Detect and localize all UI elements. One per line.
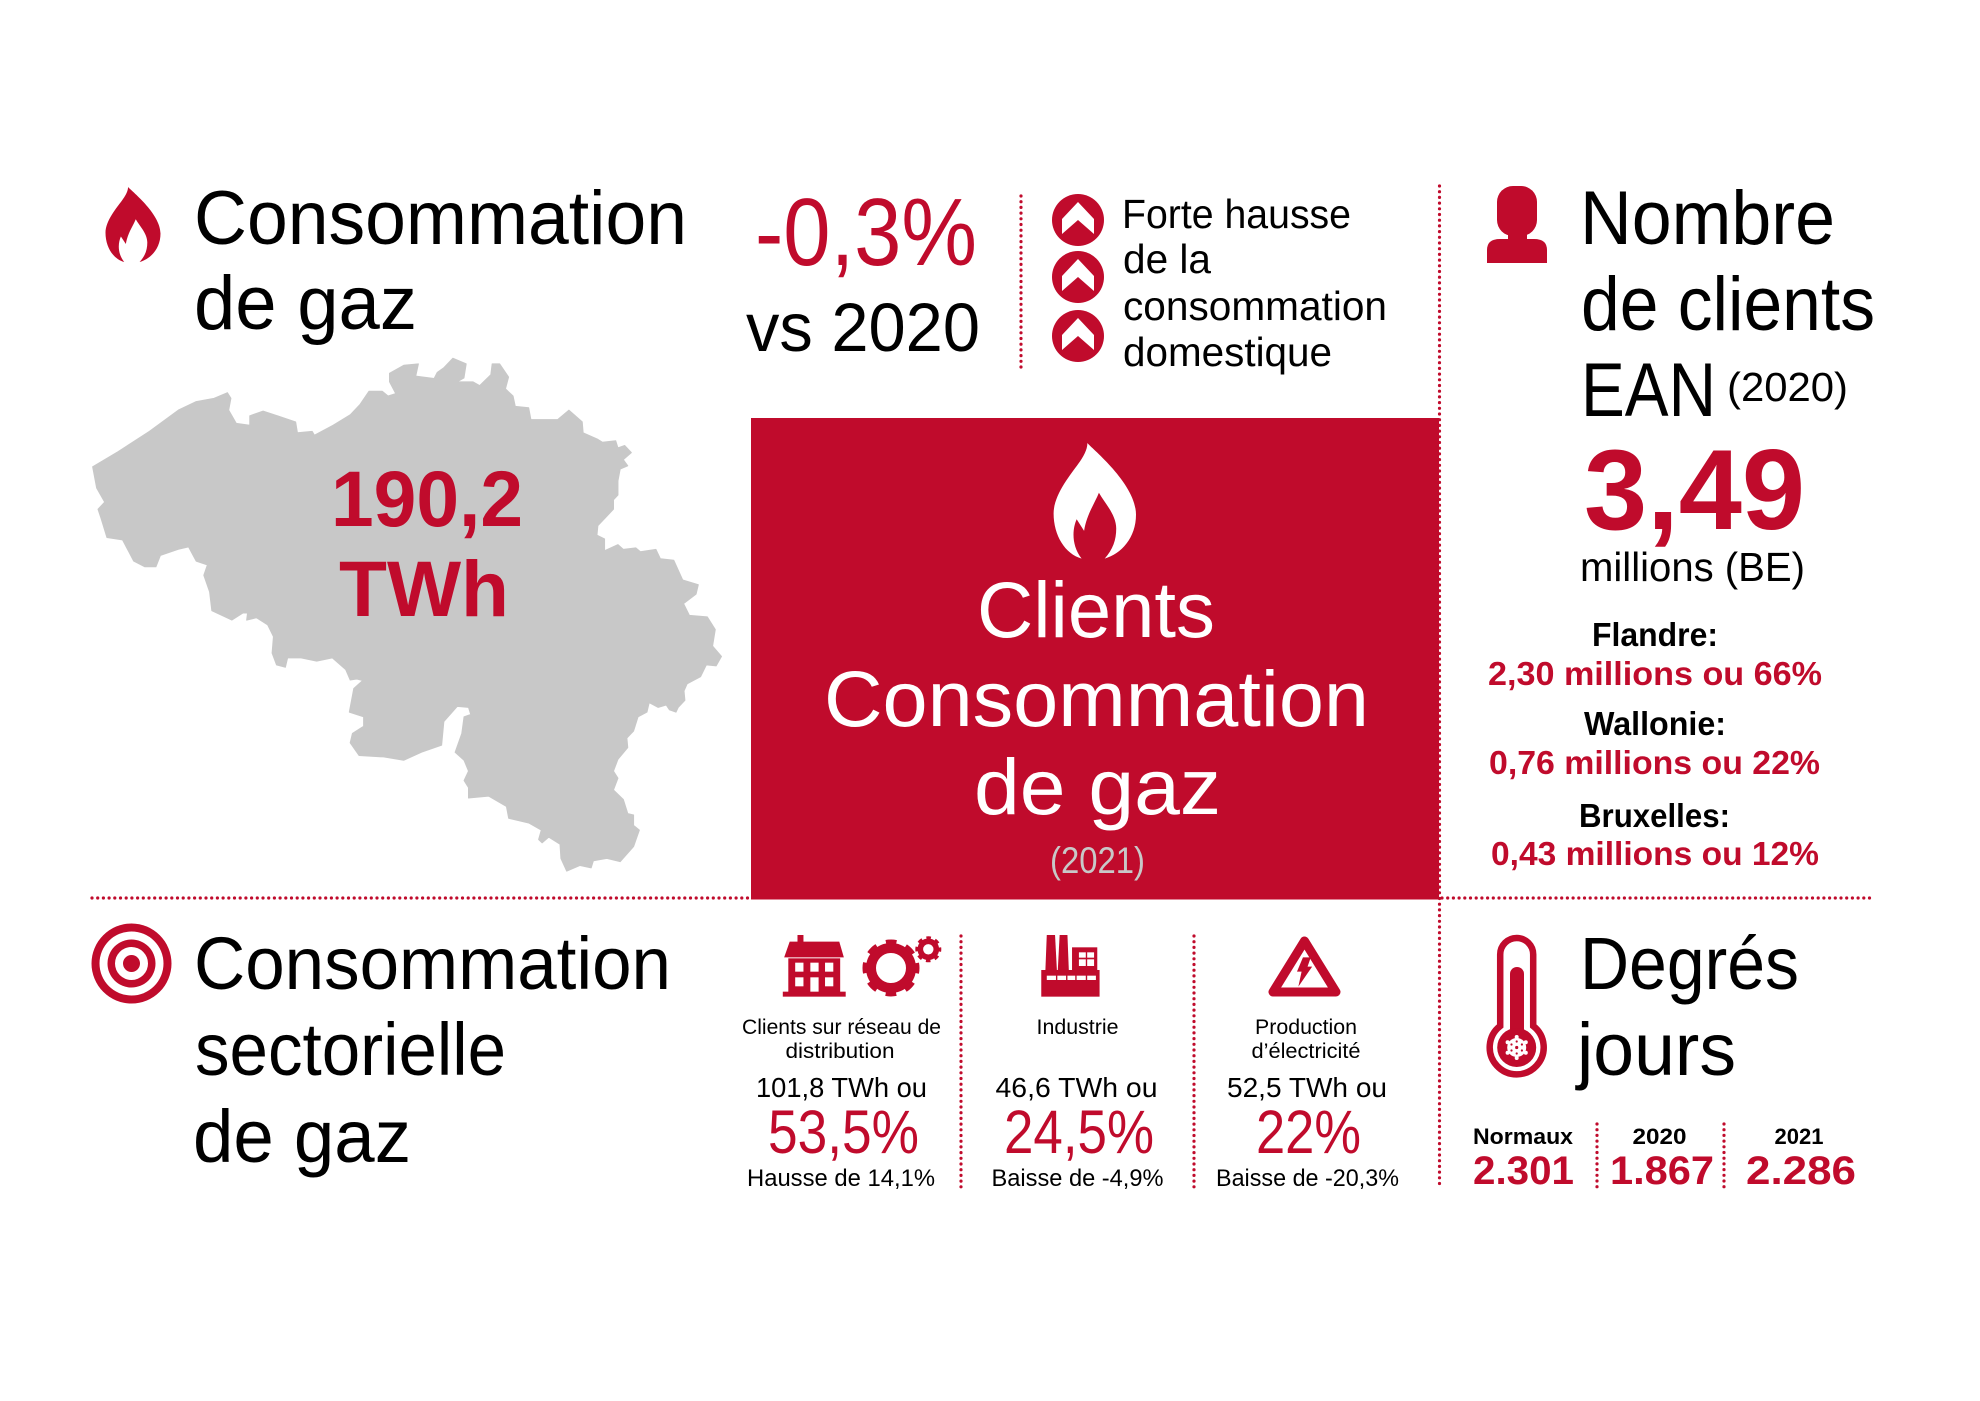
icon: thermometer [1490,938,1544,1074]
change versus 2020: -0,3% [755,179,977,286]
heading: nombre de clients EAN: Nombre [1580,176,1835,261]
text: Industrie [1036,1016,1118,1039]
regional breakdown: Bruxelles: [1579,798,1730,835]
regional breakdown: 0,76 millions ou 22% [1489,745,1820,782]
text: Clients sur réseau de [742,1016,941,1039]
text: forte hausse: Forte hausse [1122,191,1351,237]
column: industry [992,935,1164,1192]
heading: nombre de clients EAN: EAN [1581,348,1716,433]
regional breakdown: Flandre: [1592,617,1718,654]
year: (2020) [1727,364,1848,410]
text: forte hausse: domestique [1123,329,1332,375]
text [1216,1016,1399,1192]
title text: Consommation [824,654,1369,743]
heading: nombre de clients EAN [1580,176,1875,433]
panel: national gas consumption [93,176,722,871]
icon: target [92,924,172,1004]
value: 190,2 TWh [331,454,523,633]
heading: consommation sectorielle de gaz: Consommation [194,922,671,1005]
icon: house [783,935,846,997]
text: d’électricité [1252,1040,1360,1063]
icon: three up chevrons [1052,194,1104,362]
values: normal, 2020, 2021: 2021 [1774,1124,1824,1149]
regional breakdown: Wallonie: [1584,706,1726,743]
panel: number of EAN clients [1487,176,1875,873]
value: 190,2 TWh: TWh [339,544,509,633]
text: forte hausse: consommation [1123,283,1387,329]
regional breakdown [1488,617,1822,873]
column: electricity production [1216,941,1399,1192]
title text [824,565,1369,831]
text: Production [1255,1016,1357,1039]
icon: person [1487,186,1547,263]
title text: Clients [977,565,1215,654]
heading: degrés jours: jours [1575,1008,1736,1091]
regional breakdown: 0,43 millions ou 12% [1491,836,1819,873]
text: forte hausse [1122,191,1387,375]
values: normal, 2020, 2021 [1473,1124,1856,1193]
icon: high voltage triangle [1273,941,1336,992]
panel: sector consumption heading [92,922,671,1178]
text: forte hausse: de la [1123,236,1211,282]
text: distribution [786,1040,894,1063]
text: 101,8 TWh ou [756,1072,927,1103]
change versus 2020: vs 2020 [746,289,980,366]
regional breakdown: 2,30 millions ou 66% [1488,656,1822,693]
title text: de gaz [974,742,1221,831]
text: 24,5% [1004,1098,1154,1166]
text: Hausse de 14,1% [747,1165,935,1192]
heading: consommation de gaz: de gaz [194,261,417,346]
text: 22% [1256,1098,1361,1166]
icon: flame [106,187,160,262]
text: 53,5% [768,1098,919,1166]
callout: strong rise in domestic consumption [1052,191,1387,375]
heading: consommation sectorielle de gaz [193,922,671,1178]
heading: consommation de gaz: Consommation [194,176,687,261]
heading: nombre de clients EAN: de clients [1581,262,1875,347]
value: 3,49 millions: millions (BE) [1580,544,1805,590]
change versus 2020 [746,179,980,366]
panel: central title [751,418,1439,900]
text: 52,5 TWh ou [1227,1072,1387,1103]
values: normal, 2020, 2021: 2.286 [1746,1149,1856,1193]
values: normal, 2020, 2021: 2020 [1632,1124,1686,1149]
value: 190,2 TWh: 190,2 [331,454,523,543]
map of Belgium [93,358,722,871]
heading: degrés jours: Degrés [1580,922,1799,1005]
panel: degree days [1473,922,1856,1193]
icon: factory [1041,935,1100,997]
heading: degrés jours [1575,922,1799,1091]
icon: white flame [1054,443,1136,559]
heading: consommation sectorielle de gaz: sectorielle [195,1008,506,1091]
text: 46,6 TWh ou [996,1072,1158,1103]
values: normal, 2020, 2021: Normaux [1473,1124,1574,1149]
year: (2021) [1050,840,1145,881]
text: Baisse de -4,9% [992,1165,1164,1192]
text [992,1016,1164,1192]
value: 3,49 millions: 3,49 [1584,427,1805,554]
values: normal, 2020, 2021: 1.867 [1610,1149,1714,1193]
column: distribution clients [742,935,941,1192]
text: Baisse de -20,3% [1216,1165,1399,1192]
heading: consommation de gaz [194,176,687,346]
heading: consommation sectorielle de gaz: de gaz [193,1095,411,1178]
icon: gears [865,938,940,994]
text [742,1016,941,1192]
values: normal, 2020, 2021: 2.301 [1473,1149,1574,1193]
